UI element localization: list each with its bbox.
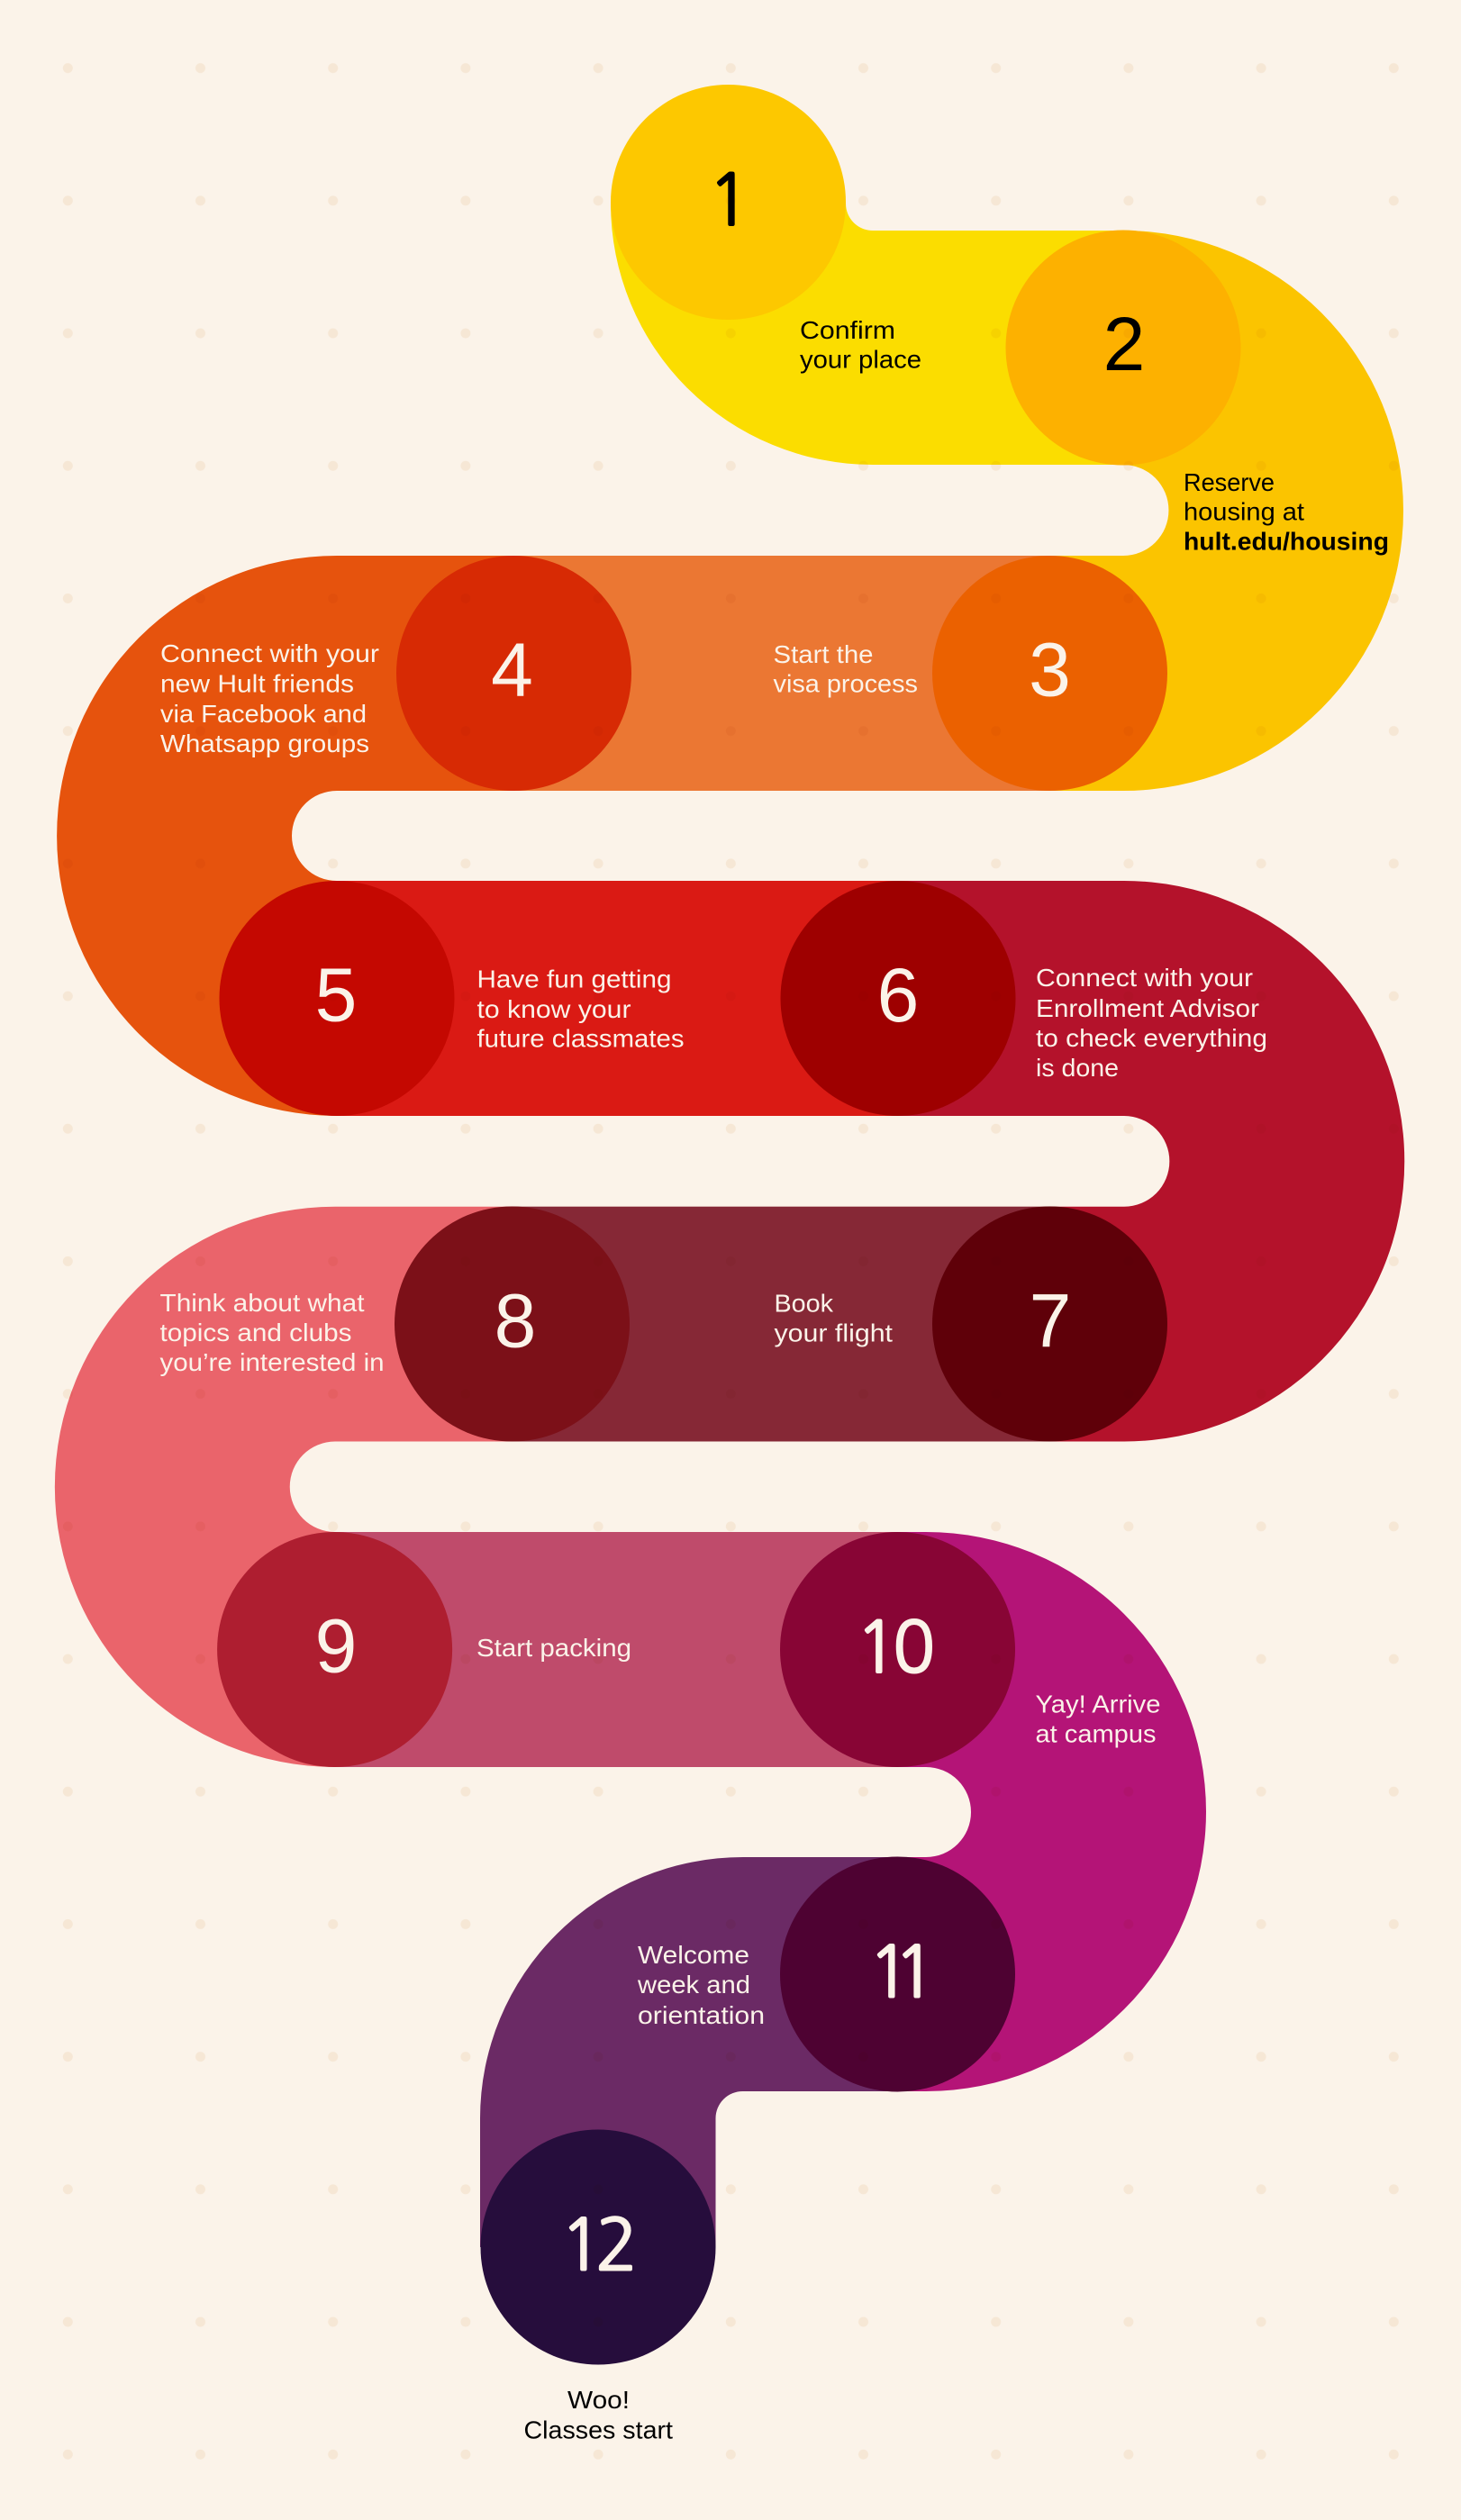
circle: step 12 xyxy=(481,2129,715,2365)
label: step 8: you’re interested in xyxy=(160,1348,384,1376)
circle: step 2 xyxy=(1005,231,1241,465)
label: step 7: Book xyxy=(775,1290,834,1317)
label: step 5: to know your xyxy=(477,995,631,1023)
label: step 4 xyxy=(160,639,379,757)
number 9: 9 xyxy=(315,1603,357,1688)
label: step 9: Start packing xyxy=(476,1634,631,1662)
number 1: 1 xyxy=(708,166,750,236)
path segment: step 11 to 12 xyxy=(480,1857,898,2247)
label: step 7: your flight xyxy=(775,1319,893,1347)
number 2: 2 xyxy=(1103,302,1145,386)
label: step 4: Whatsapp groups xyxy=(160,730,369,757)
circle: step 6 xyxy=(780,881,1016,1116)
label: step 2: housing at xyxy=(1184,497,1304,526)
label: step 10 xyxy=(1036,1690,1160,1747)
label: step 8 xyxy=(160,1289,384,1376)
label: step 11: orientation xyxy=(638,2001,765,2029)
label: step 12: Classes start xyxy=(524,2416,673,2444)
label: step 12 xyxy=(524,2386,673,2444)
label: step 6: Connect with your xyxy=(1036,964,1253,992)
label: step 3: visa process xyxy=(773,670,918,697)
label: step 11 xyxy=(637,1941,765,2029)
path segment: step 10 to 11 xyxy=(898,1532,1206,2091)
number 7: 7 xyxy=(1030,1279,1071,1364)
label: step 7 xyxy=(775,1290,893,1347)
label: step 8: Think about what xyxy=(160,1289,365,1317)
path segment: step 6 to 7 xyxy=(898,881,1404,1441)
path segment: step 4 to 5 xyxy=(57,556,513,1116)
circle: step 3 xyxy=(932,556,1167,791)
label: step 8: topics and clubs xyxy=(160,1319,351,1346)
label: step 4: new Hult friends xyxy=(160,670,354,697)
label: step 3 xyxy=(773,640,918,697)
circle: step 5 xyxy=(220,881,454,1116)
circle: step 1 xyxy=(611,85,846,320)
circle: step 11 xyxy=(780,1857,1015,2091)
label: step 6 xyxy=(1036,964,1267,1082)
circle: step 4 xyxy=(396,556,631,791)
path segment: step 9 to 10 xyxy=(335,1532,898,1767)
number 8: 8 xyxy=(495,1279,536,1364)
number 5: 5 xyxy=(315,953,357,1038)
label: step 1: Confirm xyxy=(800,316,895,344)
label: step 5: Have fun getting xyxy=(477,965,672,993)
label: step 11: Welcome xyxy=(638,1941,749,1969)
label: step 6: Enrollment Advisor xyxy=(1036,994,1259,1022)
path segment: step 7 to 8 xyxy=(513,1207,1050,1441)
label: step 4: Connect with your xyxy=(160,639,379,667)
label: step 6: is done xyxy=(1036,1054,1119,1082)
circle: step 10 xyxy=(780,1532,1015,1767)
circle: step 8 xyxy=(395,1207,630,1441)
label: step 2 xyxy=(1184,468,1389,555)
number 3: 3 xyxy=(1029,627,1071,712)
label: step 10: at campus xyxy=(1036,1720,1157,1747)
number 11: 11 xyxy=(868,1938,920,2008)
circle: step 7 xyxy=(932,1207,1167,1441)
label: step 12: Woo! xyxy=(567,2386,630,2414)
path segment: step 5 to 6 xyxy=(337,881,899,1116)
path segment: step 1 to 2 xyxy=(611,204,1123,465)
label: step 10: Yay! Arrive xyxy=(1036,1690,1160,1718)
label: step 1: your place xyxy=(800,346,921,373)
number 4: 4 xyxy=(491,627,533,712)
label: step 11: week and xyxy=(637,1971,750,1999)
path segment: step 2 to 3 xyxy=(1050,231,1403,791)
label: step 5: future classmates xyxy=(477,1025,685,1052)
number 12: 12 xyxy=(560,2210,631,2280)
label: step 4: via Facebook and xyxy=(160,700,367,728)
label: step 6: to check everything xyxy=(1036,1024,1267,1052)
number 6: 6 xyxy=(877,953,919,1038)
label: step 5 xyxy=(477,965,685,1052)
label: step 2: Reserve xyxy=(1184,468,1275,496)
label: step 1 xyxy=(800,316,921,373)
path segment: step 3 to 4 xyxy=(513,556,1050,791)
label: step 3: Start the xyxy=(773,640,874,668)
path segment: step 8 to 9 xyxy=(55,1207,513,1767)
number 10: 10 xyxy=(856,1613,931,1683)
label: step 2: hult.edu/housing xyxy=(1184,528,1389,555)
circle: step 9 xyxy=(217,1532,452,1767)
